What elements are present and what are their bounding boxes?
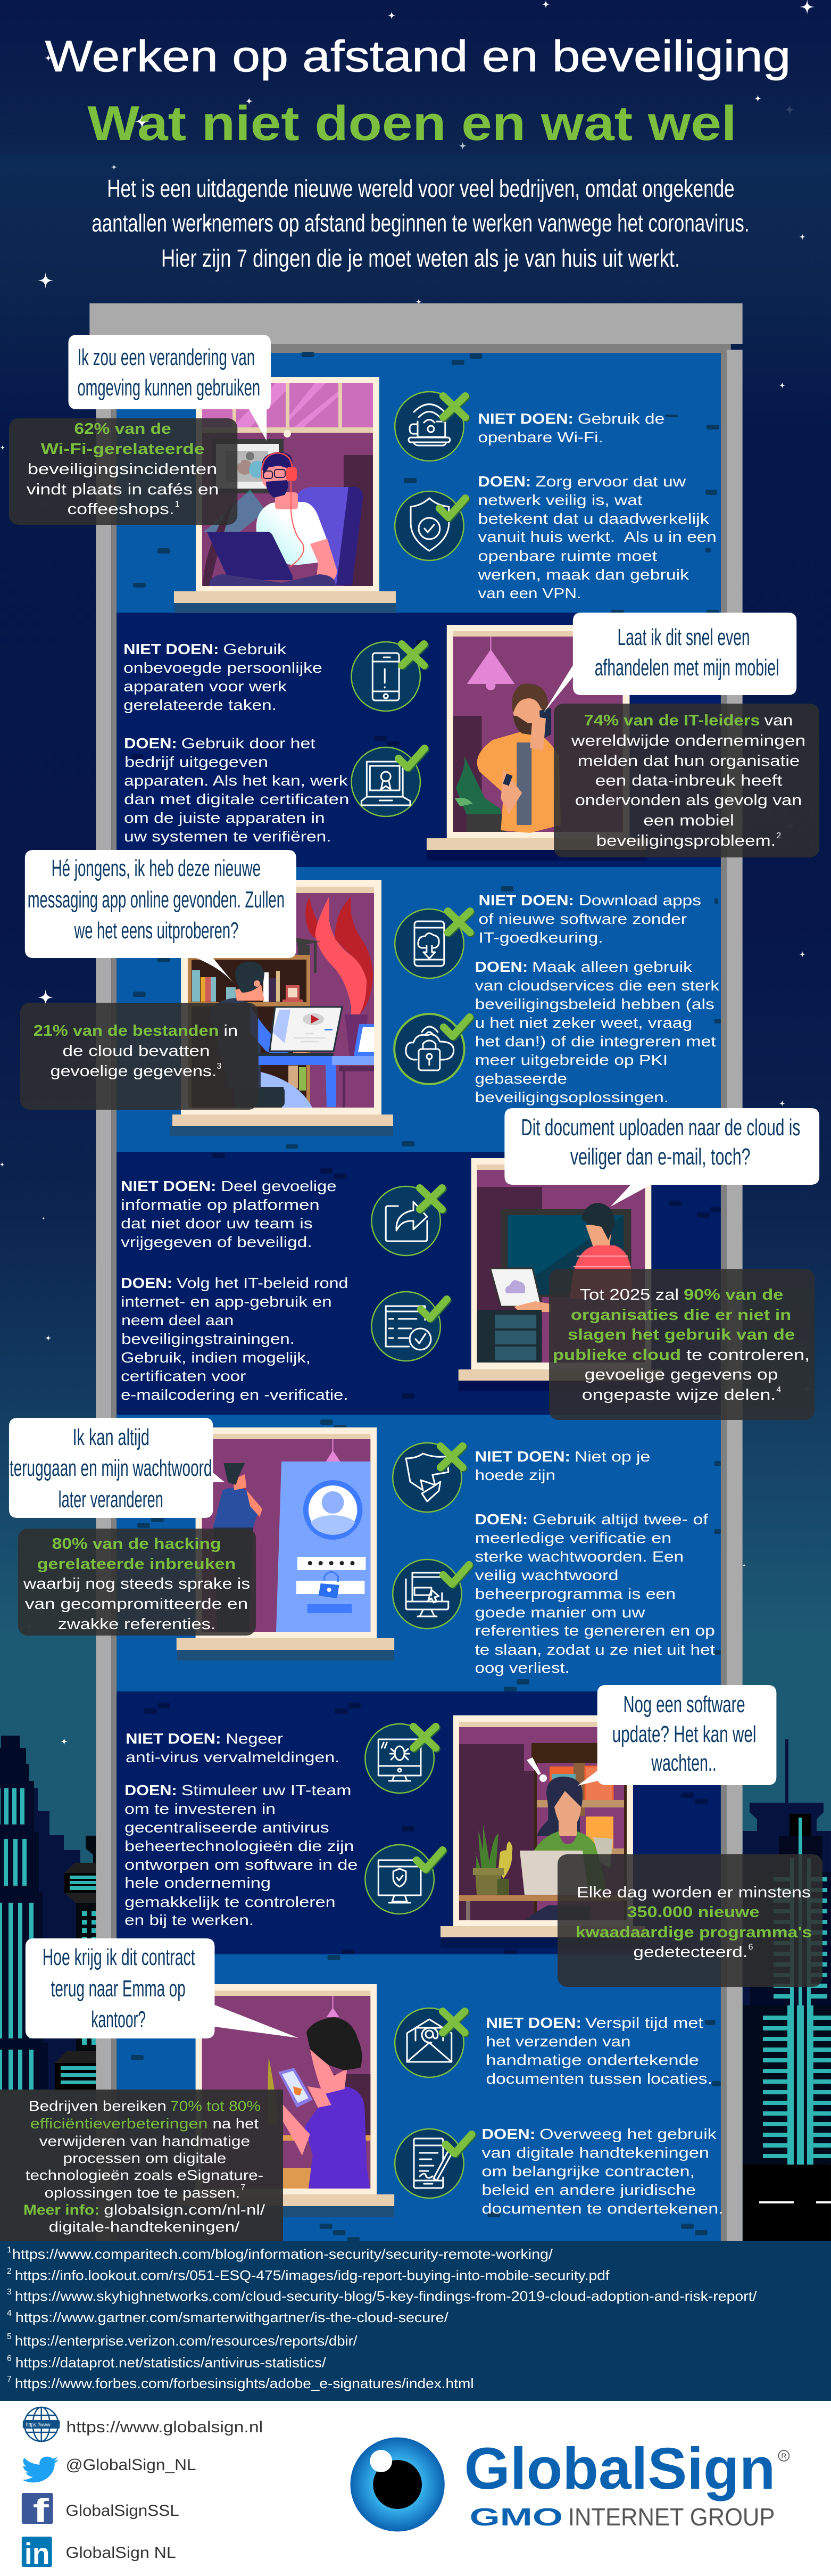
footnotes panel: 2 xyxy=(7,2267,12,2276)
stat callout: globalsign.com/nl-nl/ xyxy=(104,2202,265,2218)
speech bubble: Ik zou een verandering van xyxy=(77,344,255,370)
text: niet doen / doen xyxy=(123,641,349,845)
facebook: f xyxy=(33,2492,49,2529)
text: niet doen / doen: beheerprogramma is een xyxy=(475,1586,676,1602)
text: niet doen / doen: Gebruik xyxy=(223,641,287,657)
stat callout: waarbij nog steeds sprake is xyxy=(23,1575,250,1592)
footnotes panel: 6 xyxy=(7,2354,12,2363)
stat callout: publieke cloud xyxy=(553,1347,681,1364)
stat callout: Tot 2025 zal xyxy=(580,1286,679,1303)
stat callout: Bedrijven bereiken xyxy=(29,2098,167,2114)
intro text: Hier zijn 7 dingen die je moet weten als je van huis uit werkt. xyxy=(161,244,680,272)
text: niet doen / doen: ontworpen om software in de xyxy=(124,1856,358,1873)
icon: cloud lock xyxy=(394,1014,471,1084)
globalsign logo xyxy=(350,2437,789,2531)
window: woman with tablet xyxy=(177,1984,394,2217)
stat callout: melden dat hun organisatie xyxy=(578,753,800,770)
text: niet doen / doen: betekent dat u daadwerkelijk xyxy=(478,510,710,527)
speech bubble: Hé jongens, ik heb deze nieuwe xyxy=(52,855,261,881)
stat callout: na het xyxy=(212,2116,259,2132)
speech bubble: later veranderen xyxy=(59,1487,163,1513)
speech bubble: terug naar Emma op xyxy=(51,1976,186,2002)
speech bubble: Nog een software xyxy=(624,1691,745,1718)
stat callout xyxy=(9,418,237,525)
speech bubble xyxy=(543,613,796,713)
icon: shield xyxy=(395,491,467,560)
stat callout: 80% van de hacking xyxy=(52,1535,221,1553)
stat callout xyxy=(0,2090,283,2241)
stat callout: gerelateerde inbreuken xyxy=(37,1556,236,1573)
footnotes panel: 7 xyxy=(7,2375,12,2384)
text: niet doen / doen: hele onderneming xyxy=(124,1875,271,1891)
footnotes panel: 1 xyxy=(7,2245,12,2255)
text: niet doen / doen: documenten tussen locaties. xyxy=(486,2070,712,2087)
text: niet doen / doen: sterke wachtwoorden. Een xyxy=(475,1548,684,1565)
stat callout: gedetecteerd. xyxy=(633,1944,748,1961)
text: niet doen / doen: Overweeg het gebruik xyxy=(539,2126,717,2142)
text: niet doen / doen: NIET DOEN: xyxy=(126,1730,221,1747)
text: niet doen / doen xyxy=(477,410,717,601)
panel: antivirus xyxy=(124,1685,822,1987)
icon: cloud download phone xyxy=(395,909,471,978)
stat callout: 70% tot 80% xyxy=(170,2098,261,2114)
text: niet doen / doen: Negeer xyxy=(226,1730,283,1747)
title: Werken op afstand en beveiliging xyxy=(45,31,791,81)
wall bricks xyxy=(131,352,721,2241)
stat callout: een data-inbreuk heeft xyxy=(595,772,782,789)
stat callout: technologieën zoals eSignature- xyxy=(26,2167,263,2183)
footnotes panel: 5 xyxy=(7,2332,12,2341)
speech bubble: kantoor? xyxy=(91,2007,146,2033)
panel: platformen xyxy=(121,1108,819,1420)
stars xyxy=(0,0,815,1745)
website link: https://www.globalsign.nl xyxy=(67,2418,263,2436)
speech bubble: messaging app online gevonden. Zullen xyxy=(28,887,285,913)
icon: policy checklist xyxy=(371,1292,448,1361)
text: niet doen / doen: IT-goedkeuring. xyxy=(479,929,603,946)
text: niet doen / doen: Gebruik de xyxy=(578,410,664,427)
text: niet doen / doen: onbevoegde persoonlijke xyxy=(123,659,322,676)
text: niet doen / doen: goede manier om uw xyxy=(475,1604,645,1621)
text: niet doen / doen: dat niet door uw team is xyxy=(121,1215,313,1232)
speech bubble: veiliger dan e-mail, toch? xyxy=(570,1144,751,1170)
text: niet doen / doen: documenten te ondertekenen. xyxy=(482,2200,724,2217)
text: niet doen / doen: openbare ruimte moet xyxy=(478,548,658,564)
speech bubble xyxy=(9,1418,225,1518)
text: niet doen / doen: u het niet zeker weet, vraag xyxy=(475,1014,692,1031)
text: niet doen / doen: certificaten voor xyxy=(121,1368,246,1384)
text: niet doen / doen: uw systemen te verifiëren. xyxy=(124,828,331,845)
stat callout: gevoelige gegevens op xyxy=(585,1366,778,1383)
stat callout: 62% van de xyxy=(74,420,171,437)
text: niet doen / doen: internet- en app-gebruik en xyxy=(121,1293,332,1310)
speech bubble xyxy=(25,850,296,986)
text: niet doen / doen: gecentraliseerde antivirus xyxy=(124,1819,329,1836)
footer background xyxy=(0,2401,831,2576)
stat callout: 350.000 nieuwe xyxy=(627,1904,760,1921)
stat callout: coffeeshops. xyxy=(68,501,174,518)
text: niet doen / doen: DOEN: xyxy=(124,735,177,752)
window: man at laptop with flames xyxy=(170,880,393,1136)
text: niet doen / doen: apparaten. Als het kan, werk xyxy=(124,772,348,789)
stat callout: de cloud bevatten xyxy=(63,1043,210,1060)
text: niet doen / doen: meer uitgebreide op PKI xyxy=(475,1052,668,1068)
stat callout: in xyxy=(223,1022,238,1039)
text: niet doen / doen: informatie op platformen xyxy=(121,1196,320,1213)
text: niet doen / doen: beveiligingsoplossingen. xyxy=(475,1089,669,1105)
text: niet doen / doen: Deel gevoelige xyxy=(221,1178,337,1194)
footnotes panel: 3 xyxy=(7,2288,12,2297)
speech bubble xyxy=(69,335,271,441)
panel: handtekeningen xyxy=(0,1938,724,2241)
intro text xyxy=(92,175,750,272)
stat callout: 1 xyxy=(175,500,180,509)
panel: openbare wifi xyxy=(9,335,717,613)
text: niet doen / doen: meerledige verificatie en xyxy=(475,1530,671,1546)
text: niet doen / doen: NIET DOEN: xyxy=(486,2014,581,2031)
speech bubble: wachten.. xyxy=(651,1750,717,1776)
stat callout: 6 xyxy=(749,1943,753,1952)
footnotes panel: 4 xyxy=(7,2309,12,2318)
window: login screen xyxy=(177,1427,394,1661)
text: niet doen / doen: hoede zijn xyxy=(475,1467,555,1483)
text: niet doen / doen: dan met digitale certificaten xyxy=(124,791,349,807)
text: niet doen / doen: DOEN: xyxy=(478,473,531,490)
globalsign logo: INTERNET GROUP xyxy=(568,2503,775,2531)
stat callout: ondervonden als gevolg van xyxy=(575,792,802,809)
footnotes panel: https://www.skyhighnetworks.com/cloud-security-blog/5-key-findings-from-2019-cloud-adoption-and-risk-report/ xyxy=(15,2289,757,2304)
text: niet doen / doen: e-mailcodering en -verificatie. xyxy=(121,1386,348,1403)
building wall xyxy=(89,303,743,2241)
website link: https://www xyxy=(26,2422,51,2428)
text: niet doen / doen: van cloudservices die een sterk xyxy=(475,977,720,994)
speech bubble: Hoe krijg ik dit contract xyxy=(43,1944,195,1970)
stat callout: 21% van de bestanden xyxy=(34,1022,219,1039)
stat callout: te controleren, xyxy=(686,1347,810,1364)
panel: eigen apparaten xyxy=(123,613,819,861)
text: niet doen / doen: Maak alleen gebruik xyxy=(532,959,693,975)
text: niet doen / doen: van een VPN. xyxy=(478,585,581,601)
window: woman at laptop xyxy=(441,1715,645,1948)
text: niet doen / doen: beheertechnologieën die zijn xyxy=(124,1838,354,1854)
text: niet doen / doen xyxy=(482,2014,724,2217)
stat callout: van gecompromitteerde en xyxy=(25,1596,248,1613)
icon: wifi cup xyxy=(395,392,467,461)
footnotes panel: https://www.forbes.com/forbesinsights/adobe_e-signatures/index.html xyxy=(15,2376,474,2391)
stat callout xyxy=(554,704,819,857)
stat callout: van xyxy=(764,712,793,729)
facebook: GlobalSignSSL xyxy=(66,2502,179,2520)
panel: apps xyxy=(20,850,720,1136)
facebook xyxy=(22,2492,179,2529)
stat callout xyxy=(549,1269,815,1420)
text: niet doen / doen: Gebruik door het xyxy=(181,735,315,752)
icon: signature document xyxy=(395,2129,473,2198)
speech bubble xyxy=(578,1685,776,1786)
text: niet doen / doen: NIET DOEN: xyxy=(479,892,574,909)
text: niet doen / doen: te slaan, zodat u ze niet uit het xyxy=(475,1641,715,1658)
text: niet doen / doen: DOEN: xyxy=(124,1782,177,1798)
text: niet doen / doen: vrijgegeven of beveiligd. xyxy=(121,1234,312,1250)
stat callout xyxy=(18,1529,256,1636)
panel: wachtwoorden xyxy=(9,1418,715,1676)
text: niet doen / doen: NIET DOEN: xyxy=(123,641,219,657)
text: niet doen / doen: van digitale handtekeningen xyxy=(482,2144,709,2161)
text: niet doen / doen: neem deel aan xyxy=(121,1312,234,1328)
speech bubble xyxy=(504,1108,819,1207)
text: niet doen / doen: en bij te werken. xyxy=(124,1912,254,1928)
speech bubble: we het eens uitproberen? xyxy=(74,918,238,944)
text: niet doen / doen: DOEN: xyxy=(121,1275,172,1291)
text: niet doen / doen: Stimuleer uw IT-team xyxy=(181,1782,351,1798)
stat callout: processen om digitale xyxy=(63,2150,226,2166)
icon: laptop certificate xyxy=(351,747,426,816)
text: niet doen / doen: gerelateerde taken. xyxy=(123,697,277,713)
globalsign logo: R xyxy=(781,2451,786,2460)
text: niet doen / doen: beleid en andere juridische xyxy=(482,2182,696,2198)
skyline left xyxy=(0,1736,96,2090)
skyline right xyxy=(743,1739,831,2242)
stat callout xyxy=(20,1003,258,1110)
window: man with headphones xyxy=(174,377,396,613)
footnotes panel: https://enterprise.verizon.com/resources/reports/dbir/ xyxy=(15,2334,358,2349)
text: niet doen / doen: om belangrijke contracten, xyxy=(482,2163,695,2179)
text: niet doen / doen: vanuit huis werkt. Als u in een xyxy=(478,529,717,545)
text: niet doen / doen: DOEN: xyxy=(475,959,528,975)
text: niet doen / doen: netwerk veilig is, wat xyxy=(478,492,643,508)
stat callout: beveiligingsprobleem. xyxy=(596,832,776,849)
text: niet doen / doen: werken, maak dan gebruik xyxy=(477,566,689,583)
text: niet doen / doen: Volg het IT-beleid rond xyxy=(177,1275,348,1291)
text: niet doen / doen: NIET DOEN: xyxy=(475,1448,570,1465)
icon: shield monitor xyxy=(365,1845,444,1914)
window: man with phone xyxy=(427,625,646,861)
stat callout: 4 xyxy=(776,1385,781,1394)
stat callout: kwaadaardige programma's xyxy=(576,1924,812,1941)
stat callout: digitale-handtekeningen/ xyxy=(49,2219,240,2235)
text: niet doen / doen: Zorg ervoor dat uw xyxy=(535,473,686,490)
stat callout: verwijderen van handmatige xyxy=(39,2133,250,2149)
footnotes panel xyxy=(0,2241,831,2401)
text: niet doen / doen: DOEN: xyxy=(475,1511,528,1528)
speech bubble: Ik kan altijd xyxy=(72,1424,149,1450)
text: niet doen / doen: anti-virus vervalmeldingen. xyxy=(126,1749,340,1765)
text: niet doen / doen: NIET DOEN: xyxy=(478,410,574,427)
website link xyxy=(23,2407,263,2441)
linkedin xyxy=(22,2537,176,2570)
icon: share xyxy=(371,1186,443,1256)
window: person at monitor xyxy=(459,1158,662,1391)
speech bubble: teruggaan en mijn wachtwoord xyxy=(10,1455,212,1481)
twitter: @GlobalSign_NL xyxy=(66,2456,196,2474)
linkedin: in xyxy=(24,2537,50,2570)
stat callout: efficiëntieverbeteringen xyxy=(30,2116,207,2132)
stat callout: wereldwijde ondernemingen xyxy=(571,732,805,749)
text: niet doen / doen xyxy=(475,1448,715,1676)
globalsign logo: GMO xyxy=(470,2503,563,2531)
speech bubble: omgeving kunnen gebruiken xyxy=(77,375,260,401)
subtitle: Wat niet doen en wat wel xyxy=(87,96,737,151)
footnotes panel: https://www.comparitech.com/blog/information-security/security-remote-working/ xyxy=(12,2247,553,2262)
text: niet doen / doen: NIET DOEN: xyxy=(121,1178,216,1194)
text: niet doen / doen: gemakkelijk te controleren xyxy=(124,1894,336,1910)
text: niet doen / doen: gebaseerde xyxy=(475,1070,567,1087)
footnotes panel: https://dataprot.net/statistics/antivirus-statistics/ xyxy=(15,2356,327,2371)
stat callout: organisaties die er niet in xyxy=(571,1307,791,1324)
twitter xyxy=(22,2456,196,2482)
text: niet doen / doen xyxy=(124,1730,358,1928)
stat callout: oplossingen toe te passen. xyxy=(45,2185,240,2201)
stat callout: ongepaste wijze delen. xyxy=(582,1386,776,1403)
icon: broken shield xyxy=(393,1443,464,1512)
text: niet doen / doen: beveiligingstrainingen. xyxy=(121,1331,295,1347)
globalsign logo: GlobalSign xyxy=(464,2437,775,2501)
icon: login monitor xyxy=(393,1559,470,1629)
text: niet doen / doen: oog verliest. xyxy=(475,1659,570,1676)
stat callout: slagen het gebruik van de xyxy=(568,1326,795,1343)
stat callout: 74% van de IT-leiders xyxy=(584,712,760,729)
text: niet doen / doen: beveiligingsbeleid hebben (als xyxy=(475,996,714,1012)
stat callout: Meer info: xyxy=(23,2202,99,2218)
stat callout: 2 xyxy=(776,831,781,840)
text: niet doen / doen: apparaten voor werk xyxy=(123,678,287,695)
text: niet doen / doen: referenties te genereren en op xyxy=(475,1622,715,1639)
stat callout: 90% van de xyxy=(684,1286,783,1303)
footnotes panel: https://info.lookout.com/rs/051-ESQ-475/images/idg-report-buying-into-mobile-security.pdf xyxy=(15,2268,610,2283)
icon: email xyxy=(395,2008,466,2077)
stat callout: 3 xyxy=(217,1062,221,1071)
icon: phone xyxy=(351,642,425,711)
text: niet doen / doen: of nieuwe software zonder xyxy=(479,911,687,927)
icon: bug monitor xyxy=(365,1724,437,1793)
text: niet doen / doen: Verspil tijd met xyxy=(585,2014,703,2031)
speech bubble: Laat ik dit snel even xyxy=(618,624,750,650)
text: niet doen / doen: om de juiste apparaten in xyxy=(124,810,325,826)
text: niet doen / doen: Niet op je xyxy=(575,1448,650,1465)
text: niet doen / doen: openbare Wi-Fi. xyxy=(478,429,603,445)
stat callout: beveiligingsincidenten xyxy=(28,461,217,478)
text: niet doen / doen xyxy=(121,1178,348,1403)
stat callout: 7 xyxy=(240,2183,245,2192)
text: niet doen / doen: het dan!) of die integreren met xyxy=(475,1033,716,1050)
stat callout: zwakke referenties. xyxy=(58,1616,215,1633)
text: niet doen / doen: het verzenden van xyxy=(486,2033,630,2050)
stat callout: Wi-Fi-gerelateerde xyxy=(41,441,205,458)
stat callout xyxy=(558,1854,822,1987)
text: niet doen / doen: Gebruik, indien mogelijk, xyxy=(121,1349,311,1366)
stat callout: Elke dag worden er minstens xyxy=(577,1884,811,1901)
text: niet doen / doen: om te investeren in xyxy=(124,1801,276,1817)
text: niet doen / doen: Gebruik altijd twee- of xyxy=(533,1511,708,1528)
stat callout: gevoelige gegevens. xyxy=(51,1063,217,1080)
speech bubble xyxy=(26,1938,298,2038)
text: niet doen / doen: DOEN: xyxy=(482,2126,535,2142)
text: niet doen / doen: Download apps xyxy=(579,892,701,909)
footnotes panel: https://www.gartner.com/smarterwithgartner/is-the-cloud-secure/ xyxy=(15,2310,449,2325)
text: niet doen / doen: handmatige ondertekende xyxy=(486,2052,699,2068)
linkedin: GlobalSign NL xyxy=(66,2544,176,2562)
text: niet doen / doen: veilig wachtwoord xyxy=(475,1567,619,1583)
text: niet doen / doen xyxy=(475,892,720,1105)
stat callout: vindt plaats in cafés en xyxy=(27,481,219,498)
text: niet doen / doen: bedrijf uitgegeven xyxy=(124,754,268,770)
stat callout: een mobiel xyxy=(643,812,734,829)
speech bubble: update? Het kan wel xyxy=(612,1721,757,1747)
